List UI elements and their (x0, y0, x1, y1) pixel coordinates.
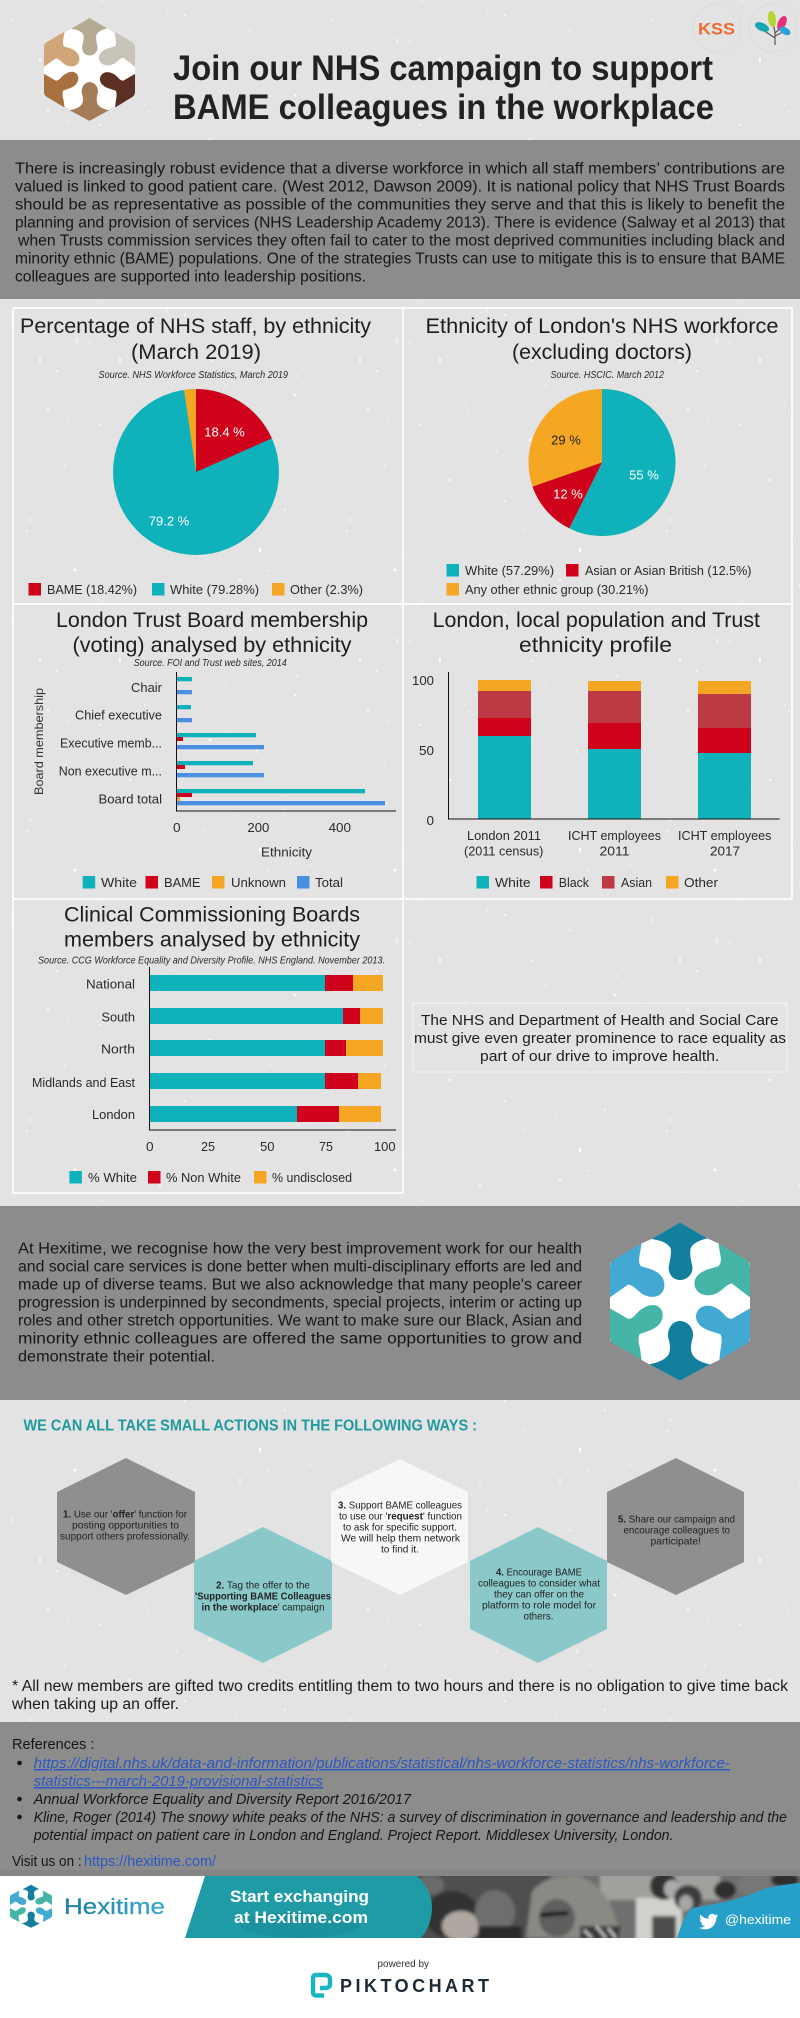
heading: London workforce: Source. HSCIC. March 2012 (550, 370, 664, 381)
legend: Trust Board: White (101, 876, 137, 890)
stacked bar chart: Commissioning Boards: 75 (319, 1139, 333, 1154)
panel: Hexitime statement band: made up of diverse teams. But we also acknowledge that many people's career (18, 1276, 582, 1294)
bar chart: Trust Board: 400 (329, 820, 351, 835)
icon: KSS logo: KSS (698, 20, 735, 38)
bar chart: Trust Board: Chair (131, 680, 163, 695)
Hexitime small logo (10, 1885, 52, 1928)
hexagon: step 4: colleagues to consider what (478, 1578, 600, 1590)
heading: Commissioning Boards: Source. CCG Workforce Equality and Diversity Profile. NHS England. November 2013. (38, 956, 385, 967)
heading: NHS staff: (March 2019) (131, 341, 261, 364)
panel: introduction text band: when Trusts commission services they often fail to cater to the most deprived communities including black and (17, 232, 785, 250)
panel: Hexitime statement band: roles and other stretch opportunities. We want to make sure our Black, Asian and (18, 1312, 582, 1330)
legend: population profile: Other (684, 876, 718, 890)
heading: population profile: London, local population and Trust (433, 609, 760, 632)
stacked bar chart: Commissioning Boards: 25 (201, 1139, 215, 1154)
panel: London population and Trust profile (412, 609, 780, 890)
icon: brown hexagon logo (44, 18, 135, 121)
panel: introduction text band: colleagues are supported into leadership positions. (15, 268, 366, 286)
panel grid lines (13, 308, 792, 1193)
legend: NHS staff: White (79.28%) (170, 583, 259, 597)
hexagon: step 4 (470, 1527, 607, 1663)
heading: Trust Board: London Trust Board membership (56, 609, 368, 632)
stacked bar chart: population profile: ICHT employees (678, 828, 772, 843)
panel: introduction text band: minority ethnic (BAME) populations. One of the strategies Trusts can use to mitigate this is to ensure that BAME (15, 250, 785, 268)
legend: NHS staff: BAME (18.42%) (47, 583, 137, 597)
panel: Hexitime statement band: and social care services is done better when multi-disciplinary efforts are led and (18, 1258, 582, 1276)
pie chart: London workforce: 55 % (629, 468, 659, 482)
bar chart: Trust Board: Chief executive (75, 708, 162, 722)
panel: Hexitime statement band: At Hexitime, we recognise how the very best improvement work for our health (18, 1240, 582, 1258)
panel: references band: https://hexitime.com/ (84, 1853, 217, 1870)
hexagon: step 5 (607, 1458, 744, 1595)
icon: KSS logo (693, 4, 741, 52)
legend: Commissioning Boards (69, 1171, 352, 1185)
hexagon: step 1: posting opportunities to (72, 1520, 179, 1532)
panel: references band: potential impact on patient care in London and England. Project Report. Middlesex University, London. (33, 1827, 673, 1844)
legend: population profile (476, 876, 718, 890)
heading: NHS staff (20, 315, 372, 381)
bar chart: Trust Board: Ethnicity (261, 844, 313, 860)
heading: Trust Board (56, 609, 368, 669)
panel: Hexitime statement band: minority ethnic colleagues are offered the same opportunities to grow and (18, 1330, 582, 1348)
bar chart: Trust Board: Non executive m... (59, 764, 162, 778)
stacked bar chart: population profile: 0 (426, 813, 434, 828)
panel: references band (0, 1722, 800, 1876)
panel: introduction text band: should be as representative as possible of the communities they serve and that this is likely to benefit the (15, 196, 785, 214)
hexagon: step 3: to use our 'request' function (339, 1511, 462, 1523)
powered by Piktochart (313, 1958, 489, 1996)
legend: Trust Board (83, 876, 343, 890)
heading: Trust Board: Source. FOI and Trust web sites, 2014 (134, 658, 287, 669)
stacked bar chart: population profile: ICHT employees (568, 828, 661, 843)
legend: Commissioning Boards: % White (88, 1171, 137, 1185)
panel: percentage of NHS staff pie (20, 315, 372, 597)
hexagon: step 4: platform to role model for (482, 1600, 596, 1612)
stacked bar chart: population profile: London 2011 (467, 828, 541, 843)
footnote (11, 1678, 788, 1713)
powered by Piktochart: PIKTOCHART (340, 1976, 489, 1996)
hexagon: step 5: encourage colleagues to (624, 1525, 730, 1537)
heading: London workforce: Ethnicity of London's NHS workforce (426, 315, 778, 338)
stacked bar chart: Commissioning Boards: Midlands and East (32, 1075, 135, 1090)
banner teal call to action (185, 1876, 432, 1938)
stacked bar chart: population profile: 2011 (600, 844, 630, 858)
hexagon: step 4: others. (524, 1611, 554, 1623)
heading: Commissioning Boards: Clinical Commissioning Boards (64, 904, 360, 927)
heading: London workforce (426, 315, 778, 381)
powered by Piktochart: powered by (378, 1958, 430, 1970)
panel: introduction text band: planning and provision of services (NHS Leadership Academy 2013). There is evidence (Salway et al 2013) that (15, 214, 786, 232)
panel: London workforce pie (426, 315, 778, 597)
stacked bar chart: Commissioning Boards (32, 967, 396, 1154)
hexagon: step 3: to find it. (381, 1544, 419, 1556)
banner teal call to action: at Hexitime.com (234, 1908, 368, 1927)
heading: population profile: ethnicity profile (519, 634, 672, 657)
hexagon: step 4: 4. Encourage BAME (496, 1567, 582, 1579)
legend: NHS staff (28, 583, 363, 597)
hexagon: step 1: 1. Use our 'offer' function for (63, 1509, 187, 1521)
hexagon: step 5: participate! (650, 1536, 701, 1548)
legend: Commissioning Boards: % Non White (166, 1171, 241, 1185)
legend: Trust Board: Total (315, 876, 343, 890)
pie chart: London workforce: 29 % (551, 432, 581, 448)
bar chart: Trust Board: Board membership (32, 688, 46, 795)
hexagon: step 2: 'Supporting BAME Colleagues (195, 1591, 331, 1603)
stacked bar chart: Commissioning Boards: London (92, 1107, 135, 1122)
pie chart: London workforce (528, 389, 676, 536)
stacked bar chart: population profile: 50 (419, 743, 434, 758)
stacked bar chart: Commissioning Boards: South (102, 1010, 135, 1024)
stacked bar chart: population profile: 2017 (710, 844, 740, 858)
panel: introduction text band: valued is linked to good patient care. (West 2012, Dawson 2009). It is national policy that NHS Trust Boards (15, 178, 785, 196)
footnote: * All new members are gifted two credits entitling them to two hours and there is no obligation to give time back (12, 1678, 788, 1695)
hexagon: step 2: 2. Tag the offer to the (216, 1580, 310, 1592)
panel: references band: https://digital.nhs.uk/data-and-information/publications/statistical/nhs-workforce-statistics/nhs-workforce- (34, 1755, 730, 1772)
panel: London Trust Board membership (32, 609, 396, 890)
heading: population profile (433, 609, 760, 657)
pie chart: NHS staff: 18.4 % (204, 424, 245, 440)
legend: population profile: Black (559, 876, 590, 890)
heading: Commissioning Boards: members analysed by ethnicity (64, 929, 360, 952)
callout: race equality statement: part of our drive to improve health. (480, 1048, 719, 1065)
twitter callout: @hexitime (725, 1912, 791, 1927)
stacked bar chart: Commissioning Boards: National (86, 976, 135, 992)
twitter callout (677, 1883, 800, 1938)
panel: introduction text band (0, 140, 800, 299)
stacked bar chart: population profile (412, 672, 780, 858)
pie chart: NHS staff (113, 389, 279, 555)
hexagon: step 3 (331, 1459, 468, 1595)
callout: race equality statement (413, 1003, 787, 1072)
footnote: when taking up an offer. (11, 1696, 179, 1713)
heading: small actions: WE CAN ALL TAKE SMALL ACTIONS IN THE FOLLOWING WAYS : (24, 1418, 477, 1435)
stacked bar chart: Commissioning Boards: North (101, 1042, 135, 1056)
banner teal call to action: Start exchanging (230, 1887, 369, 1906)
callout: race equality statement: The NHS and Department of Health and Social Care (421, 1012, 779, 1029)
hexagon: step 3: We will help them network (341, 1533, 461, 1545)
legend: Trust Board: BAME (164, 876, 200, 890)
heading: London workforce: (excluding doctors) (512, 341, 692, 364)
icon: Piktochart mark (313, 1975, 330, 1996)
legend: NHS staff: Other (2.3%) (290, 583, 363, 597)
legend: population profile: Asian (621, 876, 652, 890)
title: BAME colleagues in the workplace (173, 88, 714, 127)
panel: Hexitime statement band: demonstrate their potential. (18, 1348, 215, 1366)
icon: tree logo (749, 4, 797, 52)
panel: references band: References : (12, 1736, 94, 1753)
bar chart: Trust Board: Executive memb... (60, 736, 162, 750)
panel: Hexitime statement band: progression is underpinned by secondments, special projects, interim or acting up (18, 1294, 582, 1312)
bar chart: Trust Board: 200 (247, 820, 269, 835)
stacked bar chart: Commissioning Boards: 100 (374, 1139, 396, 1154)
legend: London workforce: Any other ethnic group (30.21%) (465, 583, 648, 597)
heading: Commissioning Boards (38, 904, 385, 967)
stacked bar chart: population profile: 100 (412, 673, 434, 688)
heading: NHS staff: Source. NHS Workforce Statistics, March 2019 (98, 370, 288, 381)
bar chart: Trust Board: Board total (98, 792, 162, 806)
panel: Clinical Commissioning Boards (32, 904, 396, 1185)
heading: Trust Board: (voting) analysed by ethnicity (72, 634, 352, 657)
panel: references band: Visit us on : (12, 1853, 82, 1870)
panel: references band: statistics---march-2019-provisional-statistics (34, 1773, 323, 1790)
bar chart: Trust Board: 0 (173, 820, 181, 835)
legend: London workforce (446, 564, 752, 597)
heading: NHS staff: Percentage of NHS staff, by ethnicity (20, 315, 372, 338)
pie chart: NHS staff: 79.2 % (149, 514, 190, 528)
hexagon: step 3: to ask for specific support. (343, 1522, 457, 1534)
legend: London workforce: Asian or Asian British (12.5%) (585, 564, 752, 578)
panel: Hexitime statement band (0, 1206, 800, 1400)
callout: race equality statement: must give even greater prominence to race equality as (414, 1030, 786, 1047)
title: Join our NHS campaign to support (173, 49, 713, 88)
legend: population profile: White (495, 876, 531, 890)
legend: Trust Board: Unknown (231, 876, 286, 890)
hexagon: step 2: in the workplace' campaign (202, 1602, 325, 1614)
banner photo (417, 1876, 800, 1938)
hexagon: step 1 (57, 1458, 195, 1595)
Hexitime wordmark: Hexitime (64, 1894, 165, 1919)
pie chart: London workforce: 12 % (553, 486, 583, 502)
hexagon: step 4: they can offer on the (494, 1589, 584, 1601)
title (173, 49, 714, 127)
hexagon: step 1: support others professionally. (60, 1531, 190, 1543)
panel: Hexitime banner (0, 1876, 800, 1938)
hexagon: step 3: 3. Support BAME colleagues (338, 1500, 462, 1512)
legend: Commissioning Boards: % undisclosed (272, 1171, 352, 1185)
stacked bar chart: Commissioning Boards: 50 (260, 1139, 274, 1154)
bar chart: Trust Board (32, 672, 396, 860)
panel: references band: Annual Workforce Equality and Diversity Report 2016/2017 (33, 1791, 412, 1808)
legend: London workforce: White (57.29%) (465, 564, 554, 578)
hexagon: step 5: 5. Share our campaign and (618, 1514, 735, 1526)
stacked bar chart: Commissioning Boards: 0 (146, 1139, 154, 1154)
icon: Hexitime hexagon logo (610, 1222, 750, 1381)
stacked bar chart: population profile: (2011 census) (464, 844, 543, 858)
panel: introduction text band: There is increasingly robust evidence that a diverse workforce in which all staff members’ contributions are (15, 160, 785, 178)
hexagon: step 2 (194, 1527, 332, 1663)
